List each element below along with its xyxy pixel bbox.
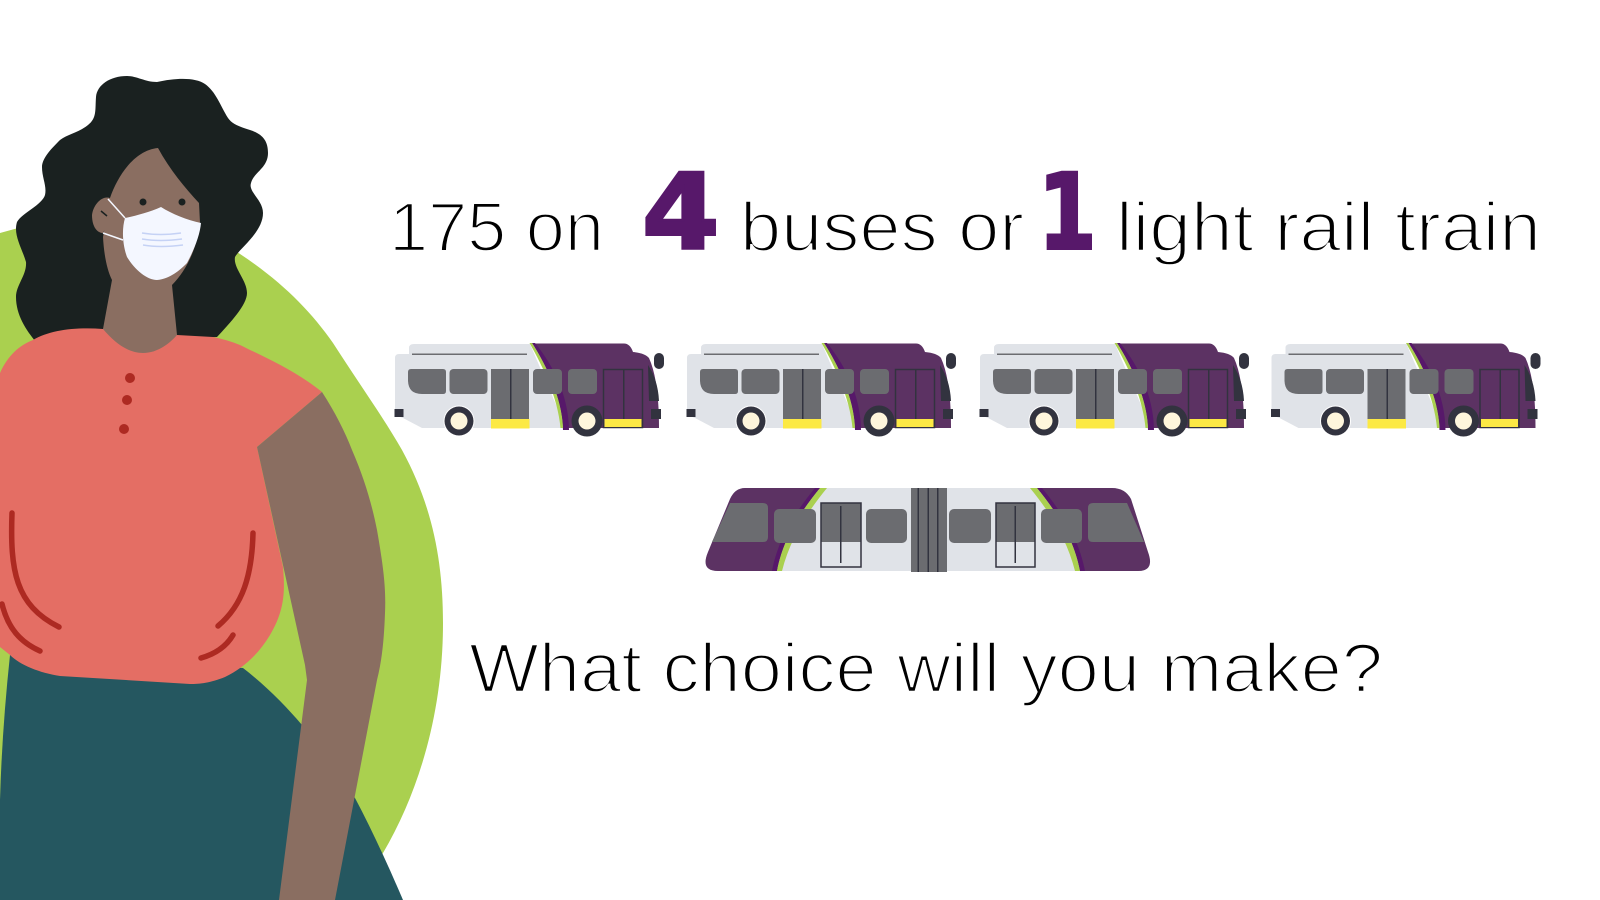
- question: What choice will you make?: [469, 629, 1383, 707]
- bus 3: [980, 343, 1249, 436]
- neck and face: [100, 148, 200, 362]
- shirt folds: [2, 513, 253, 658]
- bus 1: [394, 343, 664, 436]
- text: 175 on: 175 on: [389, 188, 604, 266]
- left purple end: [706, 488, 820, 571]
- headline: [389, 152, 1541, 274]
- shirt buttons: [119, 373, 135, 434]
- livery stripes: [772, 488, 1085, 571]
- light rail train: [706, 488, 1150, 572]
- left door: [821, 503, 861, 567]
- green background blob: [0, 222, 443, 900]
- skirt: [0, 655, 403, 900]
- illustration: woman wearing a face mask: [0, 76, 403, 900]
- ear detail: [101, 211, 107, 216]
- eyes: [140, 198, 186, 206]
- number 1: 1: [1038, 152, 1097, 274]
- windows: [712, 503, 1144, 543]
- number 4: 4: [642, 152, 720, 274]
- bus 2: [686, 343, 956, 436]
- text: buses or: buses or: [740, 188, 1024, 266]
- right purple end: [1037, 488, 1150, 571]
- text: light rail train: light rail train: [1116, 188, 1541, 266]
- mask pleats: [142, 233, 183, 246]
- bus 4: [1271, 343, 1540, 436]
- shirt: [0, 328, 322, 684]
- right door: [996, 503, 1035, 567]
- face mask: [123, 207, 201, 280]
- train body: [706, 488, 1150, 571]
- arm: [257, 392, 385, 900]
- ear: [92, 197, 112, 233]
- mask straps: [103, 199, 125, 240]
- articulated joint: [911, 488, 947, 572]
- hair: [16, 76, 268, 342]
